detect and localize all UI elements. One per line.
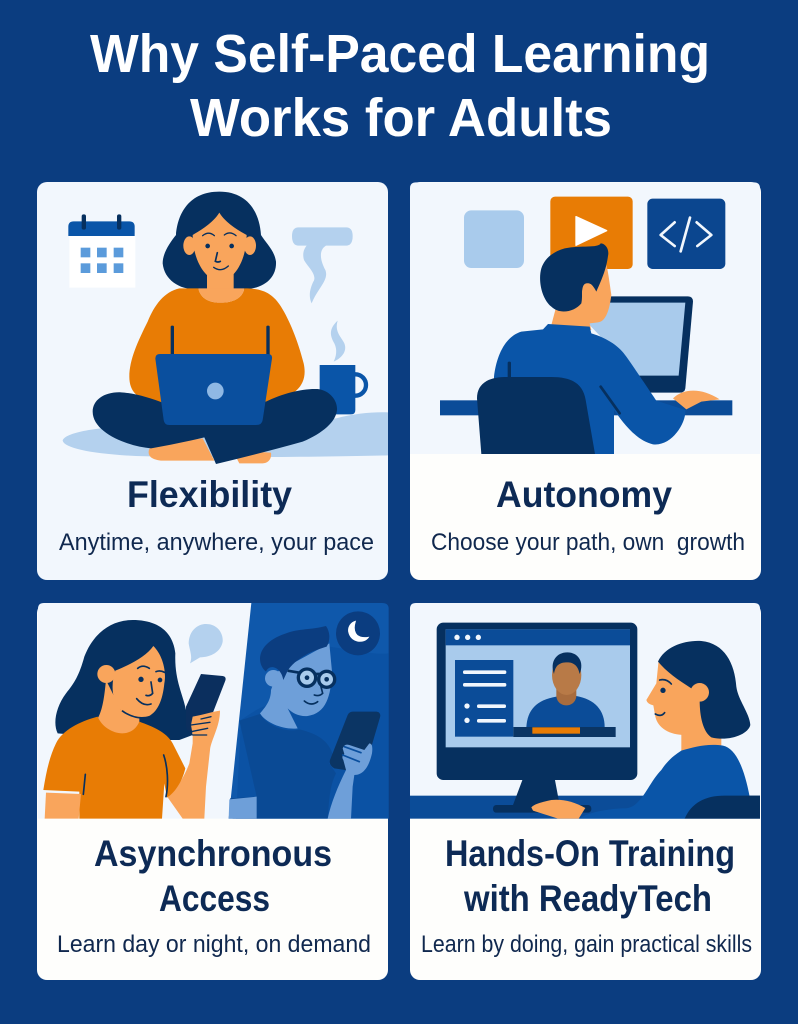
illustration: man at computer xyxy=(410,182,760,454)
heading: flexibility: Flexibility xyxy=(127,474,292,515)
icon: moon badge xyxy=(336,611,380,655)
title: Why Self-Paced Learning xyxy=(90,24,710,84)
panel: flexibility xyxy=(37,182,388,580)
icon: calendar xyxy=(68,214,135,288)
icon: coffee mug xyxy=(320,365,366,414)
icon: chair xyxy=(477,377,595,454)
icon: desk xyxy=(440,400,732,415)
icon: monitor xyxy=(588,296,693,393)
icon: chair xyxy=(685,796,760,819)
text: hands-on caption: Learn by doing, gain practical skills xyxy=(421,931,752,958)
heading: asynchronous access: Asynchronous xyxy=(94,833,332,874)
sidebar list xyxy=(455,660,513,737)
heading: asynchronous access: Access xyxy=(159,878,270,919)
icon: monitor xyxy=(437,623,637,813)
heading: hands-on training xyxy=(445,833,735,919)
icon: floor shadow xyxy=(63,412,388,457)
title xyxy=(90,24,710,148)
illustration: day and night phone users xyxy=(38,603,389,819)
panel: autonomy xyxy=(410,182,761,580)
icon: code tile xyxy=(647,199,725,269)
heading: asynchronous access xyxy=(94,833,332,919)
panel: hands-on training xyxy=(410,603,761,980)
woman with phone xyxy=(43,620,226,819)
text: flexibility caption: Anytime, anywhere, your pace xyxy=(59,529,374,556)
icon: coffee steam xyxy=(331,321,345,362)
illustration: woman with laptop xyxy=(63,192,388,464)
icon: blank tile xyxy=(464,210,524,268)
woman xyxy=(93,192,337,464)
man xyxy=(477,243,720,454)
woman xyxy=(531,641,760,819)
text: asynchronous caption: Learn day or night, on demand xyxy=(57,931,371,958)
panel: asynchronous access xyxy=(37,603,389,980)
presenter xyxy=(526,652,605,727)
heading: hands-on training: Hands-On Training xyxy=(445,833,735,874)
icon: speech steam xyxy=(292,227,353,303)
icon: play tile xyxy=(550,197,633,269)
icon: desk xyxy=(410,796,760,819)
title: Works for Adults xyxy=(190,88,612,148)
illustration: woman at video lesson xyxy=(410,603,760,819)
heading: hands-on training: with ReadyTech xyxy=(463,878,712,919)
man with phone xyxy=(229,626,380,819)
text: autonomy caption: Choose your path, own growth xyxy=(431,529,745,556)
heading: autonomy: Autonomy xyxy=(496,474,672,515)
icon: speech bubble xyxy=(189,624,223,663)
